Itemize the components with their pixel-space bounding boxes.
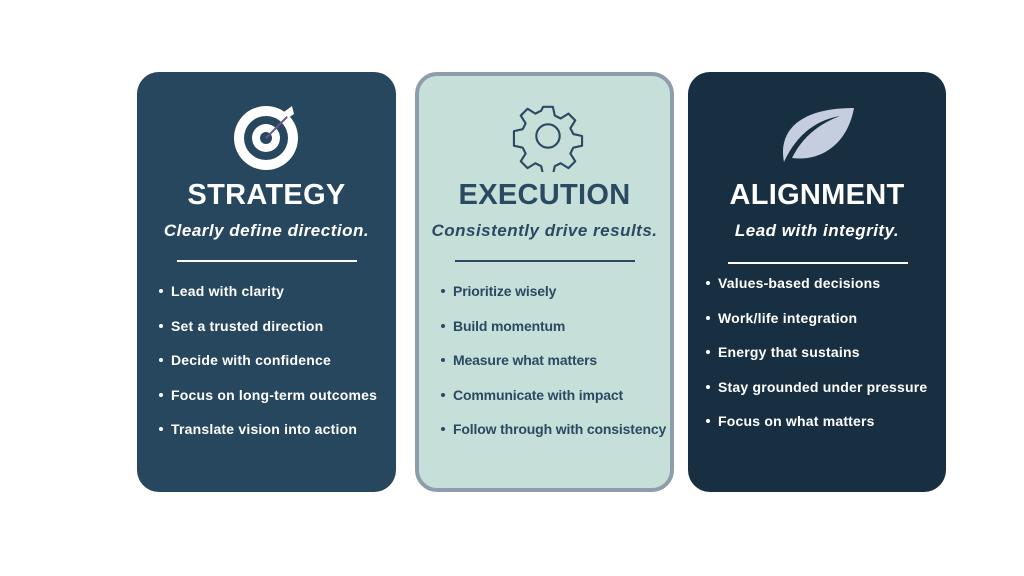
heading: alignment: ALIGNMENT <box>729 179 905 211</box>
subtitle: Consistently drive results. <box>431 221 658 240</box>
subtitle: Clearly define direction. <box>164 221 369 240</box>
subtitle: Lead with integrity. <box>735 221 899 240</box>
bullet list: Measure what matters <box>453 352 597 368</box>
bullet list <box>706 275 927 429</box>
icon: target <box>234 106 298 170</box>
bullet list: Set a trusted direction <box>171 318 323 334</box>
bullet list: Translate vision into action <box>171 421 357 437</box>
heading: strategy: STRATEGY <box>187 179 346 211</box>
bullet list: Lead with clarity <box>171 283 284 299</box>
bullet list: Build momentum <box>453 318 565 334</box>
bullet list: Energy that sustains <box>718 344 860 360</box>
bullet list: Prioritize wisely <box>453 283 556 299</box>
panel: strategy <box>137 72 396 492</box>
panel: alignment <box>688 72 946 492</box>
bullet list: Decide with confidence <box>171 352 331 368</box>
bullet list: Follow through with consistency <box>453 421 666 437</box>
heading: execution: EXECUTION <box>459 179 630 211</box>
bullet list: Focus on what matters <box>718 413 875 429</box>
bullet list: Work/life integration <box>718 310 857 326</box>
bullet list: Values-based decisions <box>718 275 880 291</box>
bullet list: Communicate with impact <box>453 387 623 403</box>
bullet list <box>441 283 666 437</box>
icon: leaf <box>783 108 854 162</box>
bullet list: Stay grounded under pressure <box>718 379 927 395</box>
icon: gear <box>512 106 584 172</box>
panel: execution <box>415 72 674 492</box>
bullet list <box>159 283 377 437</box>
bullet list: Focus on long-term outcomes <box>171 387 377 403</box>
